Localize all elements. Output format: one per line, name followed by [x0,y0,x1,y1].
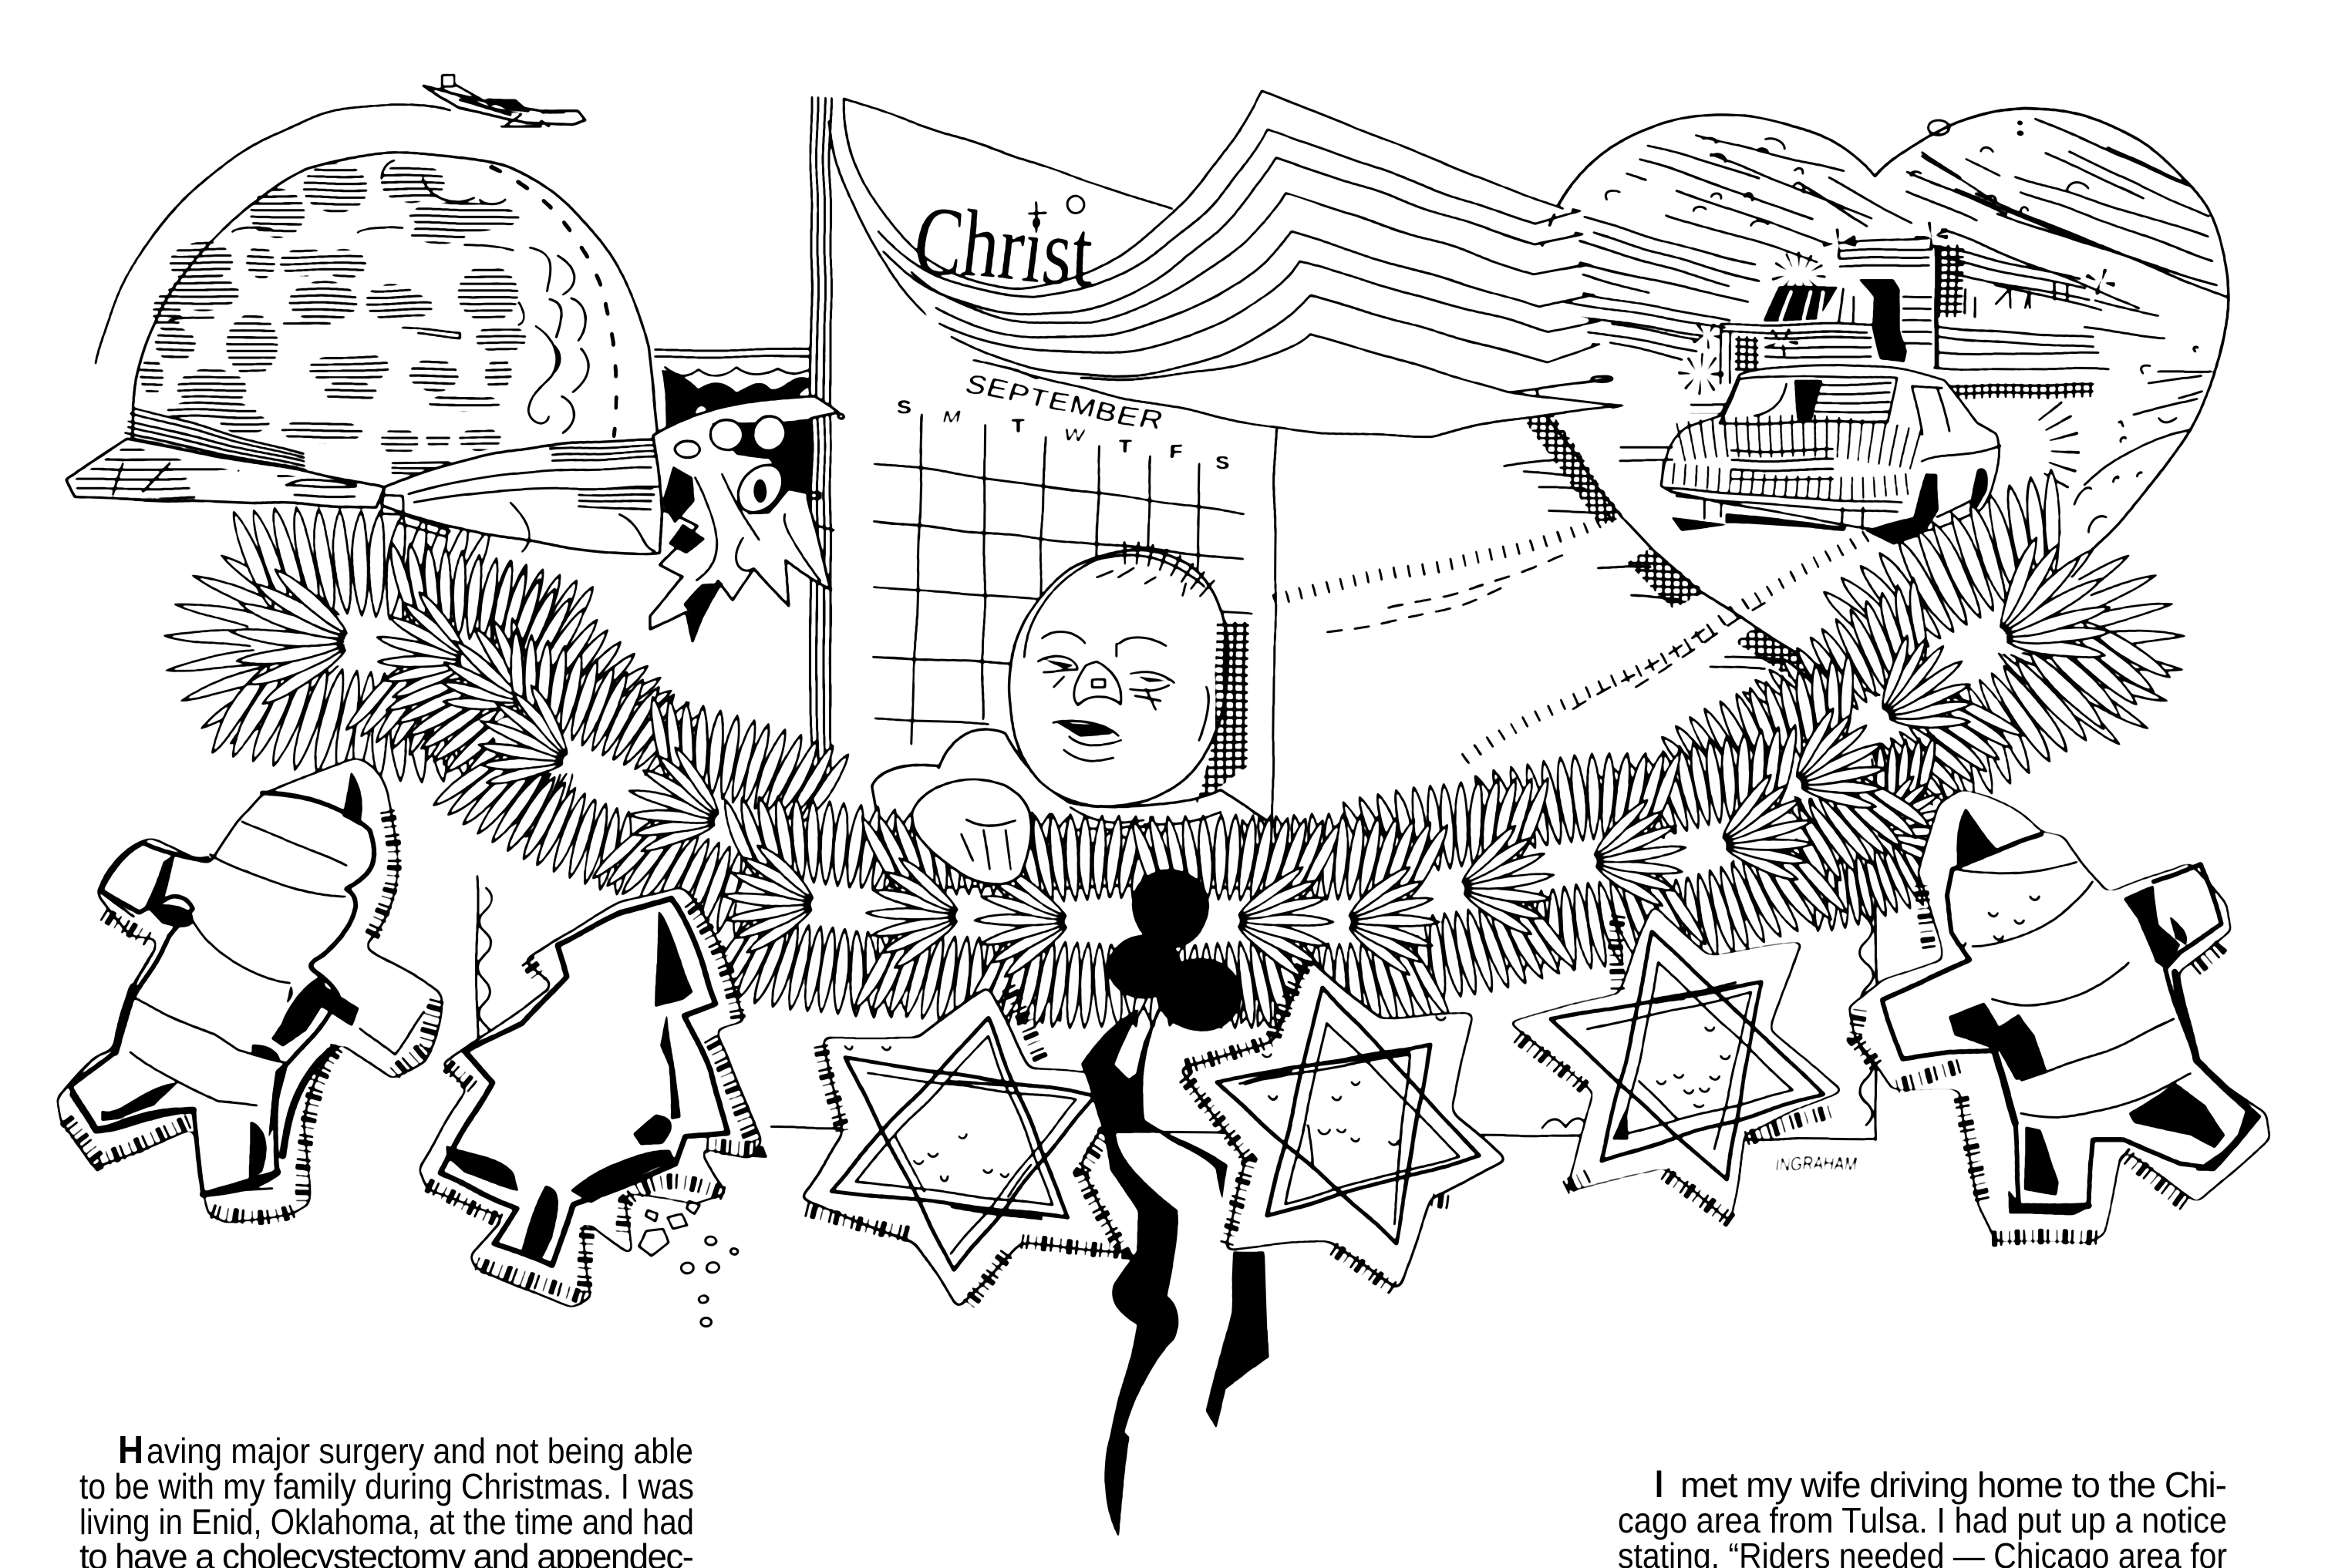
month heading and weekday letters [898,369,1231,473]
tree cookie [417,886,763,1327]
garland [165,454,2184,1028]
ribbon bow [1081,869,1269,1539]
month heading and weekday letters: T [1119,435,1134,456]
article text: right column [1618,1462,2227,1568]
baby hair and shading [1023,554,1248,803]
month heading and weekday letters: S [898,396,912,416]
month heading and weekday letters: SEPTEMBER [962,369,1165,436]
background frame: left posts, strip and border [477,96,1875,1141]
baby fist in front of garland [912,780,1031,885]
star cookie three [1509,903,1845,1224]
article text: right column: cago area from Tulsa. I had put up a notice [1618,1500,2227,1540]
month heading and weekday letters: M [942,406,962,427]
star cookie one [798,984,1135,1312]
month heading and weekday letters: F [1169,442,1183,463]
baby body [872,728,1285,887]
speed lines [1558,118,2227,415]
article text: right column: I [1655,1462,1663,1506]
month heading and weekday letters: S [1215,453,1231,473]
truck trailer [1841,237,2108,369]
article text: left column: aving major surgery and not being able [147,1431,693,1471]
month heading and weekday letters: T [1011,416,1026,436]
arc above helmet [96,103,450,365]
holly sprig [650,396,839,641]
plane [423,76,586,126]
baby face [1037,633,1175,761]
right santa cookie [1847,789,2270,1243]
star cookie three and right santa [1509,789,2270,1243]
headlight bursts on truck [1686,230,2106,385]
baby [872,551,1285,887]
month heading and weekday letters: W [1063,425,1087,446]
article text: right column: met my wife driving home to the Chi- [1680,1465,2227,1505]
heart with highway scene [1504,108,2229,698]
helmet band [123,408,449,473]
article text: left column: H [118,1428,143,1472]
heart outline [1531,108,2229,698]
camouflage hatching [140,163,527,455]
road edges [1272,516,1874,759]
left santa cookie [56,758,443,1226]
helmet dome [131,153,658,490]
article text: left column [79,1428,694,1568]
article text: left column: living in Enid, Oklahoma, at the time and had [79,1502,694,1542]
Christmas gothic lettering on calendar page: Christ [910,183,1097,308]
article text: left column: to be with my family during Christmas. I was [79,1466,694,1506]
bib and bow [1067,807,1221,846]
truck cab [1690,279,2094,412]
camouflage outlines [170,162,588,433]
helmet brim [67,439,385,508]
star cookie three and right santa: INGRAHAM [1775,1153,1858,1176]
star cookie two [1177,956,1509,1291]
curled calendar pages [829,90,1626,436]
calendar [829,90,1626,887]
cookie crumbs [638,1200,737,1327]
calendar grid [872,413,1276,887]
helmet, cigar, holly and plane [67,76,844,641]
post brackets [805,492,834,530]
heart hatched left edge [1504,415,1843,694]
cigar [382,439,661,554]
car [1646,364,2065,547]
baby head [1009,551,1228,806]
